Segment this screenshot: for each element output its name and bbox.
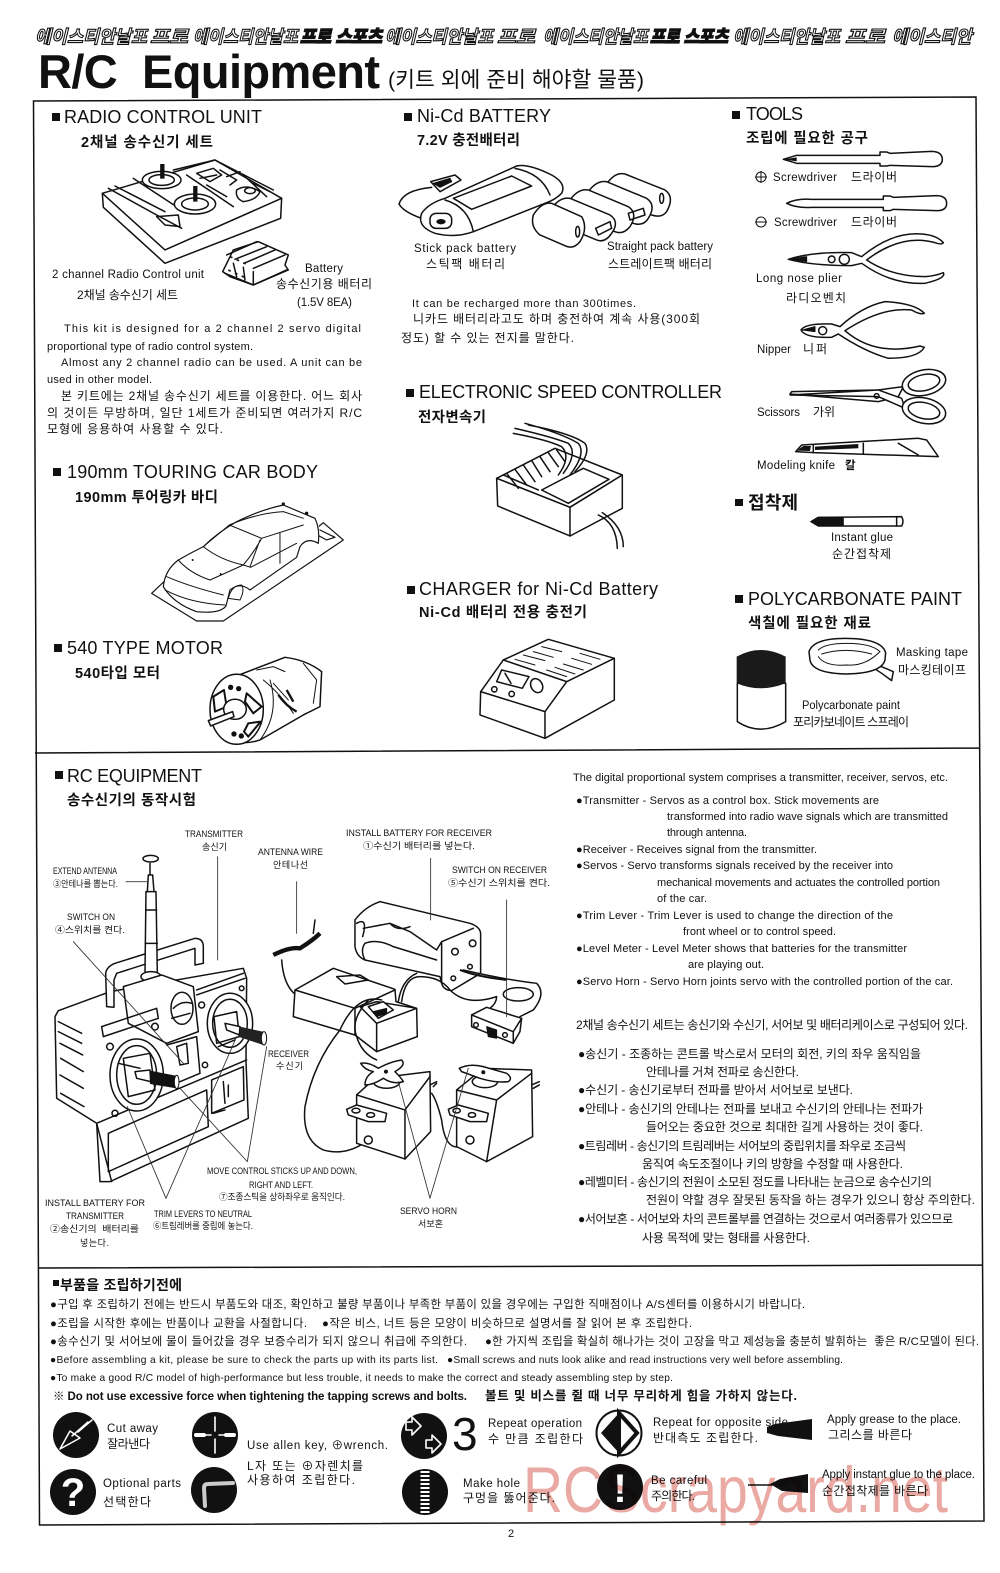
caption: battery: (1.5V 8EA) [297, 297, 352, 309]
heading: before assembly: 부품을 조립하기전에 [60, 1277, 182, 1293]
caption: be careful: Be careful [651, 1475, 707, 1487]
caption: repeat operation: Repeat operation [488, 1418, 582, 1430]
caption: apply grease [827, 1414, 961, 1442]
heading: electronic speed controller: 전자변속기 [418, 409, 486, 426]
caption: scissors [757, 405, 835, 419]
panel: RC equipment [45, 766, 975, 1248]
caption: long nose plier: Long nose plier [756, 273, 842, 285]
header logo strip: 에이스티안 [892, 27, 974, 47]
caption: masking tape: 마스킹테이프 [898, 663, 966, 677]
section: touring car body [53, 462, 343, 621]
icon: paint can [737, 650, 786, 729]
heading: radio control unit: 2채널 송수신기 세트 [81, 134, 213, 151]
caption: apply instant glue [822, 1469, 975, 1498]
text: korean system description: 전원이 약할 경우 잘못된 동작을 하는 경우가 있으니 항상 주의한다. [646, 1192, 975, 1207]
text: korean system description: 2채널 송수신기 세트는 송신기와 수신기, 서어보 및 배터리케이스로 구성되어 있다. [576, 1018, 968, 1032]
caption: cut away: Cut away [107, 1423, 158, 1435]
caption: phillips screwdriver: 드라이버 [851, 170, 897, 184]
icon: car body [152, 502, 343, 621]
text: english system description: ●Level Meter - Level Meter shows that batteries for the transmitter [576, 943, 907, 955]
icon: glue tube [748, 1474, 808, 1493]
label: install battery for transmitter: INSTALL BATTERY FOR [45, 1198, 145, 1208]
icon: modeling knife [796, 438, 938, 457]
text: korean system description: 안테나를 거쳐 전파로 송신한다. [646, 1065, 799, 1079]
icon: cut away [53, 1412, 99, 1458]
caption: instant glue: 순간접착제 [832, 547, 891, 561]
icon: wrench cross [192, 1412, 238, 1458]
heading: Ni-Cd battery: Ni-Cd BATTERY [417, 106, 551, 126]
caption: allen key: 사용하여 조립한다. [247, 1473, 355, 1487]
label: antenna wire: 안테나선 [273, 860, 308, 870]
title: (키트 외에 준비 해야할 물품) [388, 68, 644, 92]
caption: optional parts: Optional parts [103, 1478, 181, 1490]
heading: polycarbonate paint: 색칠에 필요한 재료 [748, 615, 871, 632]
heading: adhesive: 접착제 [748, 493, 798, 513]
heading: Ni-Cd battery: 7.2V 충전배터리 [417, 132, 520, 149]
caption: masking tape: Masking tape [896, 647, 968, 659]
heading: tools [732, 104, 868, 147]
section: electronic speed controller [406, 382, 722, 548]
text: korean system description: 사용 목적에 맞는 형태를 사용한다. [642, 1231, 810, 1245]
caption: opposite side [653, 1417, 788, 1445]
icon: opposite side [596, 1410, 642, 1456]
text: english system description: through antenna. [667, 827, 747, 839]
caption: make hole: Make hole [463, 1478, 520, 1490]
text: korean system description: ●트림레버 - 송신기의 트림레버는 서어보의 중립위치를 좌우로 조금씩 [578, 1139, 906, 1153]
leader lines [73, 857, 507, 1198]
icon: optional parts: ? [61, 1471, 85, 1515]
caption: optional parts: 선택한다 [103, 1495, 151, 1509]
panel: before assembly [50, 1277, 979, 1515]
caption: scissors: Scissors [757, 407, 800, 419]
text: assembly notes: ●작은 비스, 너트 등은 모양이 비슷하므로 설명서를 잘 읽어 본 후 조립한다. [322, 1316, 692, 1330]
caption: radio control unit: 2 channel Radio Control unit [52, 269, 205, 281]
caption: modeling knife: Modeling knife [757, 460, 835, 472]
label: install battery for transmitter: TRANSMITTER [66, 1211, 124, 1221]
text: battery description: 니카드 배터리라고도 하며 충전하여 계속 사용(300회 [413, 312, 700, 326]
icon: speed controller [497, 423, 623, 548]
caption: phillips screwdriver [755, 170, 897, 184]
title [38, 45, 644, 98]
label: transmitter: 송신기 [202, 842, 227, 852]
text: assembly notes: ●Small screws and nuts look alike and read instructions very well before assembling. [447, 1355, 843, 1366]
text: english system description: transformed into radio wave signals which are transmitted [667, 811, 948, 823]
header logo strip: 에이스티안날포 [35, 27, 149, 47]
icon: drill hole [402, 1469, 448, 1515]
heading: touring car body: 190mm TOURING CAR BODY [67, 462, 318, 482]
text: assembly notes: ●Before assembling a kit, please be sure to check the parts up with its parts list. [50, 1355, 438, 1366]
legend: assembly symbols [50, 1408, 975, 1515]
text: battery description: 정도) 할 수 있는 전지를 말한다. [401, 331, 574, 345]
caption: masking tape [896, 647, 968, 677]
caption: radio control unit: 2채널 송수신기 세트 [77, 288, 178, 302]
label: antenna wire [258, 847, 323, 870]
caption: nipper: Nipper [757, 344, 791, 356]
icon: phillips screwdriver [783, 151, 942, 167]
section: polycarbonate paint [735, 589, 968, 729]
heading: 540 type motor: 540타입 모터 [75, 665, 160, 682]
caption: flathead screwdriver: Screwdriver [774, 217, 837, 229]
caption: cut away [107, 1423, 158, 1451]
caption: phillips screwdriver: Screwdriver [773, 172, 837, 184]
warning line: ※ Do not use excessive force when tightening the tapping screws and bolts. [53, 1391, 467, 1403]
header logo strip: 프로 [845, 27, 887, 47]
text: radio description: 본 키트에는 2채널 송수신기 세트를 이용한다. 어느 회사 [61, 389, 362, 403]
header logo strip: 에이스티안날포 [543, 27, 650, 47]
text: korean system description: ●수신기 - 송신기로부터 전파를 받아서 서어보로 보낸다. [578, 1083, 853, 1097]
label: receiver: 수신기 [276, 1061, 303, 1071]
panel: required equipment [47, 104, 968, 744]
caption: allen key: L자 또는 ⊕자렌치를 [247, 1459, 363, 1473]
caption: apply instant glue: Apply instant glue to the place. [822, 1469, 975, 1481]
label: switch on receiver [448, 865, 550, 888]
label: install battery for transmitter: ②송신기의 배터리를 [50, 1224, 139, 1234]
icon: receiver switch [472, 1007, 522, 1043]
text: battery description: It can be recharged more than 300times. [412, 298, 636, 310]
caption: apply instant glue: 순간접착제를 바른다 [822, 1484, 928, 1498]
heading: Ni-Cd battery [404, 106, 551, 149]
icon: be careful: ! [613, 1467, 627, 1511]
caption: allen key: Use allen key, ⊕wrench. [247, 1440, 388, 1452]
label: extend antenna: EXTEND ANTENNA [53, 866, 117, 876]
caption: repeat operation [488, 1418, 583, 1446]
caption: instant glue [831, 532, 893, 561]
label: transmitter [185, 829, 243, 852]
icon: glue tube [811, 517, 903, 526]
text: english system description: of the car. [657, 893, 707, 905]
text: english system description: ●Receiver - Receives signal from the transmitter. [576, 844, 817, 856]
text: radio description: proportional type of radio control system. [47, 341, 253, 353]
icon: nipper [801, 302, 924, 358]
caption: polycarbonate paint [793, 700, 909, 729]
caption: cut away: 잘라낸다 [107, 1437, 150, 1451]
text: korean system description: ●안테나 - 송신기의 안테나는 전파를 보내고 수신기의 안테나는 전파가 [578, 1102, 923, 1116]
text: radio description: 모형에 응용하여 사용할 수 있다. [47, 422, 223, 436]
caption: be careful [651, 1475, 707, 1503]
header logo strip: 에이스티안날포 [733, 27, 842, 47]
text: english system description: mechanical movements and actuates the controlled portion [657, 877, 940, 889]
text: korean system description: 들어오는 중요한 것으로 최대한 길게 사용하는 것이 좋다. [646, 1120, 923, 1134]
section: adhesive [735, 493, 903, 561]
text: assembly notes [50, 1297, 979, 1384]
label: antenna wire: ANTENNA WIRE [258, 847, 323, 857]
heading: charger: Ni-Cd 배터리 전용 충전기 [419, 604, 587, 621]
section: tools [732, 104, 948, 472]
heading: radio control unit [52, 107, 262, 151]
icon: optional parts [50, 1469, 96, 1515]
label: trim levers to neutral [153, 1209, 253, 1231]
caption: make hole [463, 1478, 555, 1505]
caption: polycarbonate paint: Polycarbonate paint [802, 700, 901, 712]
text: assembly notes: ●조립을 시작한 후에는 반품이나 교환을 사절합니다. [50, 1316, 307, 1330]
caption: radio control unit [52, 269, 205, 302]
diagram: radio system test [45, 828, 550, 1248]
text: battery description [401, 298, 700, 345]
caption: battery: Battery [305, 263, 343, 275]
text: assembly notes: ●구입 후 조립하기 전에는 반드시 부품도와 대조, 확인하고 불량 부품이나 부족한 부품이 있을 경우에는 구입한 직매점이나 A/S센터를 이용하시기 바랍니다. [50, 1297, 805, 1311]
header logo strip: 프로 [150, 27, 190, 47]
icon: transmitter [55, 855, 267, 1182]
label: switch on [55, 912, 125, 935]
text: english system description: ●Servo Horn - Servo Horn joints servo with the controlled portion of the car. [576, 976, 953, 988]
heading: electronic speed controller: ELECTRONIC SPEED CONTROLLER [419, 382, 722, 402]
caption: flathead screwdriver [755, 215, 897, 229]
caption: opposite side: 반대측도 조립한다. [653, 1431, 758, 1445]
heading: RC equipment: 송수신기의 동작시험 [67, 792, 196, 809]
label: transmitter: TRANSMITTER [185, 829, 243, 839]
text: radio description: This kit is designed for a 2 channel 2 servo digital [64, 323, 361, 335]
caption: optional parts [103, 1478, 181, 1509]
label: trim levers to neutral: TRIM LEVERS TO NEUTRAL [154, 1209, 252, 1219]
icon: receiver battery holder [355, 902, 507, 991]
text: radio description: 의 것이든 무방하며, 일단 1세트가 준비되면 여러가지 R/C [47, 406, 362, 420]
caption: be careful: 주의한다. [651, 1489, 695, 1503]
caption: apply grease: 그리스를 바른다 [828, 1428, 912, 1442]
text: korean system description: ●레벨미터 - 송신기의 전원이 소모된 정도를 나타내는 눈금으로 송수신기의 [578, 1175, 932, 1189]
label: switch on receiver: ⑤수신기 스위치를 켠다. [448, 877, 550, 888]
text: english system description: ●Servos - Servo transforms signals received by the receiver into [576, 860, 893, 872]
title: R/C Equipment [38, 45, 380, 98]
text: korean system description: ●송신기 - 조종하는 콘트롤 박스로서 모터의 회전, 키의 좌우 움직임을 [578, 1047, 921, 1061]
section: 540 motor [54, 638, 322, 744]
caption: long nose plier: 라디오벤치 [786, 291, 846, 305]
label: trim levers to neutral: ⑥트림레버를 중립에 놓는다. [153, 1220, 253, 1231]
label: extend antenna: ③안테나를 뽑는다. [53, 879, 118, 889]
caption: apply grease: Apply grease to the place. [827, 1414, 961, 1426]
caption: modeling knife: 칼 [845, 459, 856, 472]
header logo strip: 프로 스포츠 [650, 27, 729, 47]
label: install battery for transmitter [45, 1198, 145, 1248]
caption: scissors: 가위 [813, 405, 835, 419]
heading: 540 type motor: 540 TYPE MOTOR [67, 638, 223, 658]
caption: nipper: 니퍼 [803, 342, 827, 356]
caption: straight pack battery: 스트레이트팩 배터리 [608, 257, 712, 271]
text: english system description: ●Trim Lever - Trim Lever is used to change the direction of the [576, 910, 893, 922]
caption: instant glue: Instant glue [831, 532, 893, 544]
text: english system description: ●Transmitter - Servos as a control box. Stick movements are [576, 795, 879, 807]
heading: tools: 조립에 필요한 공구 [746, 130, 868, 147]
label: servo horn: 서보혼 [418, 1218, 443, 1229]
text: english system description [573, 772, 953, 988]
label: switch on: ④스위치를 켠다. [55, 924, 125, 935]
label: servo horn: SERVO HORN [400, 1206, 457, 1216]
warning line: 볼트 및 비스를 쥘 때 너무 무리하게 힘을 가하지 않는다. [485, 1388, 797, 1403]
header logo strip: 프로 스포츠 [300, 27, 383, 47]
caption: straight pack battery: Straight pack battery [607, 241, 713, 253]
text: korean system description: 움직여 속도조절이나 키의 방향을 수정할 때 사용한다. [642, 1157, 903, 1171]
text: radio description [47, 323, 362, 436]
text: english system description: are playing out. [688, 959, 764, 971]
icon: radio set box [102, 160, 282, 263]
caption: stick pack battery: Stick pack battery [414, 243, 516, 255]
label: move control sticks: ⑦조종스틱을 상하좌우로 움직인다. [219, 1191, 345, 1202]
caption: stick pack battery [414, 243, 516, 271]
text: assembly notes: ●한 가지씩 조립을 확실히 해나가는 것이 고장을 막고 제성능을 충분히 발휘하는 좋은 R/C모델이 된다. [485, 1334, 979, 1348]
label: install battery for receiver [346, 828, 492, 851]
label: move control sticks [207, 1166, 357, 1202]
heading: touring car body: 190mm 투어링카 바디 [75, 489, 218, 506]
icon: repeat arrows [401, 1413, 447, 1459]
heading: charger: CHARGER for Ni-Cd Battery [419, 579, 658, 599]
caption: polycarbonate paint: 포리카보네이트 스프레이 [793, 715, 909, 729]
text: assembly notes: ●To make a good R/C model of high-performance but less trouble, it needs to make the correct and steady assembling step by step. [50, 1373, 673, 1384]
header logo strip: 에이스티안날포 [385, 27, 495, 47]
icon: masking tape [809, 638, 893, 681]
label: receiver [268, 1049, 309, 1071]
heading: 540 type motor [54, 638, 223, 682]
text: english system description: The digital proportional system comprises a transmitter, receiver, servos, etc. [573, 772, 948, 784]
text: radio description: Almost any 2 channel radio can be used. A unit can be [61, 357, 362, 369]
label: install battery for transmitter: 넣는다. [80, 1238, 109, 1248]
header logo strip [35, 27, 974, 47]
caption: opposite side: Repeat for opposite side [653, 1417, 788, 1429]
label: install battery for receiver: ①수신기 배터리를 넣는다. [363, 841, 475, 851]
icon: antenna wire [273, 920, 320, 993]
caption: long nose plier [756, 273, 846, 305]
label: switch on: SWITCH ON [67, 912, 115, 922]
icon: wiring [305, 970, 541, 1152]
icon: servo one [347, 1060, 437, 1159]
heading: radio control unit: RADIO CONTROL UNIT [64, 107, 262, 127]
icon: long nose plier [788, 234, 944, 283]
caption: battery: 송수신기용 배터리 [276, 277, 372, 291]
icon: receiver [293, 968, 417, 1052]
icon: be careful [597, 1464, 643, 1511]
caption: straight pack battery [607, 241, 713, 271]
icon: straight pack battery [532, 174, 670, 247]
section: Ni-Cd battery [399, 106, 713, 345]
text: korean system description [576, 1018, 975, 1245]
icon: stick pack battery [399, 165, 563, 235]
heading: RC equipment: RC EQUIPMENT [67, 766, 202, 786]
caption: repeat operation: 수 만큼 조립한다 [488, 1432, 583, 1446]
label: move control sticks: MOVE CONTROL STICKS UP AND DOWN, [207, 1166, 357, 1176]
heading: RC equipment [55, 766, 202, 809]
caption: stick pack battery: 스틱팩 배터리 [426, 257, 505, 271]
label: install battery for receiver: INSTALL BATTERY FOR RECEIVER [346, 828, 492, 838]
section: radio control unit [47, 107, 372, 436]
icon: grease tube [767, 1419, 812, 1440]
header logo strip: 에이스티안날포 [193, 27, 300, 47]
caption: nipper [757, 342, 827, 356]
label: servo horn [400, 1206, 457, 1229]
warning line [53, 1388, 797, 1403]
icon: flathead screwdriver [787, 196, 947, 211]
icon: servo two [448, 1065, 539, 1162]
caption: flathead screwdriver: 드라이버 [851, 215, 897, 229]
caption: battery [276, 263, 372, 309]
text: assembly notes: ●송수신기 및 서어보에 물이 들어갔을 경우 보증수리가 되지 않으니 취급에 주의한다. [50, 1334, 467, 1348]
icon: transmitter batteries [223, 242, 288, 285]
caption: make hole: 구멍을 뚫어준다. [463, 1491, 555, 1505]
text: korean system description: ●서어보혼 - 서어보와 차의 콘트롤부를 연결하는 것으로서 여러종류가 있으므로 [578, 1212, 953, 1226]
label: receiver: RECEIVER [268, 1049, 309, 1059]
text: radio description: used in other model. [47, 374, 152, 386]
label: extend antenna [53, 866, 118, 889]
heading: polycarbonate paint: POLYCARBONATE PAINT [748, 589, 962, 609]
heading: touring car body [53, 462, 318, 506]
caption: allen key [247, 1440, 388, 1487]
label: switch on receiver: SWITCH ON RECEIVER [452, 865, 547, 875]
icon: charger [480, 639, 614, 738]
icon: motor [208, 657, 322, 744]
heading: polycarbonate paint [735, 589, 962, 632]
heading: charger [407, 579, 658, 621]
icon: scissors [790, 366, 948, 428]
text: english system description: front wheel or to control speed. [683, 926, 836, 938]
page number: 2 [508, 1528, 514, 1540]
number: repeat count: 3 [452, 1408, 478, 1460]
section: charger [407, 579, 658, 738]
label: move control sticks: RIGHT AND LEFT. [249, 1180, 313, 1190]
icon: hex key [191, 1467, 237, 1513]
heading: tools: TOOLS [746, 104, 803, 124]
heading: electronic speed controller [406, 382, 722, 426]
header logo strip: 프로 [497, 27, 537, 47]
